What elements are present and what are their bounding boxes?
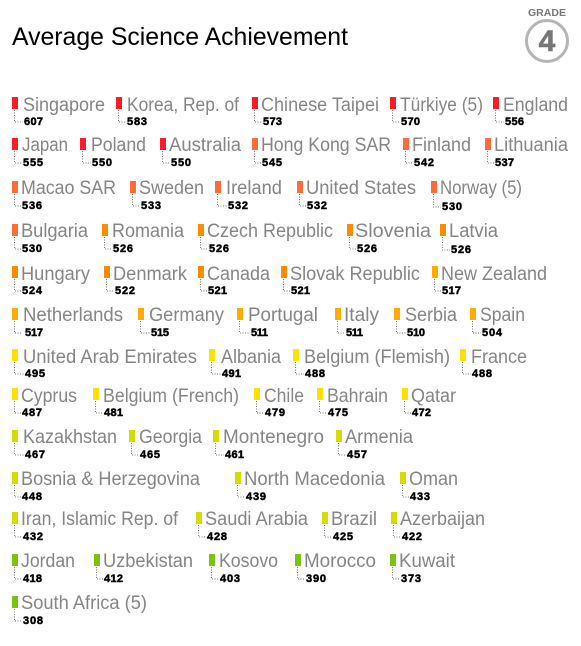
item: Latvia 526 bbox=[440, 221, 498, 256]
item: Brazil 425 bbox=[322, 509, 377, 543]
item: Slovak Republic 521 bbox=[281, 264, 420, 297]
item: Chinese Taipei 573 bbox=[252, 95, 379, 128]
item: Canada 521: Canada bbox=[207, 264, 270, 285]
item: Qatar 472: 472 bbox=[412, 407, 431, 419]
item: Latvia 526: Latvia bbox=[449, 221, 498, 242]
item: Oman 433: Oman bbox=[409, 469, 458, 490]
item: Kosovo 403 bbox=[209, 551, 278, 585]
item: Georgia 465 bbox=[129, 427, 202, 461]
item: Slovenia 526 bbox=[347, 221, 431, 255]
item: Belgium (French) 481 bbox=[93, 386, 239, 419]
item: Japan 555: 555 bbox=[23, 157, 43, 169]
item: Azerbaijan 422: 422 bbox=[402, 531, 422, 543]
item: Chile 479 bbox=[254, 386, 304, 419]
item: United States 532: United States bbox=[306, 178, 416, 199]
item: Japan 555: Japan bbox=[22, 135, 68, 156]
item: Türkiye 570: 570 bbox=[401, 116, 420, 128]
item: Hungary 524 bbox=[12, 264, 90, 297]
item: Singapore 607 bbox=[12, 95, 105, 128]
item: Armenia 457 bbox=[336, 427, 413, 461]
item: England 556: England bbox=[503, 95, 568, 116]
item: Türkiye 570: Türkiye (5) bbox=[400, 95, 483, 116]
item: Albania 491: Albania bbox=[221, 347, 281, 368]
item: Jordan 418: Jordan bbox=[21, 551, 75, 572]
item: Morocco 390: 390 bbox=[306, 573, 326, 585]
item: Poland 550 bbox=[80, 135, 146, 169]
item: Georgia 465: Georgia bbox=[139, 427, 202, 448]
item: Hong Kong SAR 545: Hong Kong SAR bbox=[261, 135, 391, 156]
item: Kosovo 403: 403 bbox=[220, 573, 240, 585]
item: Italy 511 bbox=[335, 305, 379, 339]
grade badge: GRADE bbox=[528, 8, 566, 19]
item: New Zealand 517 bbox=[432, 264, 547, 297]
item: Finland 542: Finland bbox=[412, 135, 471, 156]
item: Macao SAR 536: 536 bbox=[22, 200, 42, 212]
item: Denmark 522 bbox=[104, 264, 187, 297]
item: South Africa 308: South Africa (5) bbox=[21, 593, 147, 614]
item: Iran 432: 432 bbox=[23, 531, 43, 543]
item: Montenegro 461: 461 bbox=[225, 449, 244, 461]
item: Netherlands 517 bbox=[12, 305, 123, 339]
item: Slovenia 526: Slovenia bbox=[355, 221, 431, 242]
item: United Arab Emirates 495: United Arab Emirates bbox=[23, 347, 197, 368]
item: Sweden 533 bbox=[130, 178, 204, 212]
item: Belgium (Flemish) 488 bbox=[293, 347, 450, 380]
item: Germany 515: 515 bbox=[151, 327, 169, 339]
item: Sweden 533: 533 bbox=[141, 200, 161, 212]
item: Chile 479: 479 bbox=[265, 407, 285, 419]
item: Qatar 472 bbox=[402, 386, 457, 419]
item: Kazakhstan 467 bbox=[12, 427, 117, 461]
item: Hong Kong SAR 545 bbox=[252, 135, 391, 169]
item: Belgium (Flemish) 488: 488 bbox=[305, 368, 325, 380]
item: Korea 583 bbox=[116, 95, 240, 128]
item: Slovak Republic 521: 521 bbox=[291, 285, 310, 297]
item: Iran 432 bbox=[12, 509, 179, 543]
item: Romania 526 bbox=[102, 221, 184, 255]
item: Jordan 418 bbox=[12, 551, 75, 585]
item: Bulgaria 530 bbox=[12, 221, 88, 255]
item: Kazakhstan 467: Kazakhstan bbox=[23, 427, 117, 448]
item: Iran 432: Iran, Islamic Rep. of bbox=[21, 509, 179, 530]
item: North Macedonia 439 bbox=[235, 469, 385, 503]
item: Kosovo 403: Kosovo bbox=[219, 551, 278, 572]
item: Australia 550: Australia bbox=[169, 135, 241, 156]
item: United States 532 bbox=[297, 178, 416, 212]
item: Chinese Taipei 573: Chinese Taipei bbox=[261, 95, 379, 116]
item: Saudi Arabia 428: Saudi Arabia bbox=[205, 509, 308, 530]
item: Slovenia 526: 526 bbox=[357, 243, 377, 255]
item: Oman 433 bbox=[400, 469, 458, 503]
item: Australia 550: 550 bbox=[171, 157, 191, 169]
item: Chile 479: Chile bbox=[264, 386, 304, 407]
item: Jordan 418: 418 bbox=[23, 573, 42, 585]
item: Bosnia & Herzegovina 448 bbox=[12, 469, 200, 503]
item: Brazil 425: 425 bbox=[333, 531, 353, 543]
item: Albania 491 bbox=[209, 347, 281, 380]
item: Romania 526: 526 bbox=[113, 243, 133, 255]
item: Ireland 532: Ireland bbox=[226, 178, 282, 199]
item: Norway 530 bbox=[431, 178, 522, 213]
item: Bahrain 475: 475 bbox=[328, 407, 348, 419]
item: Denmark 522: Denmark bbox=[113, 264, 187, 285]
item: Ireland 532: 532 bbox=[228, 200, 248, 212]
item: New Zealand 517: New Zealand bbox=[441, 264, 547, 285]
item: Türkiye 570 bbox=[390, 95, 483, 128]
item: Armenia 457: Armenia bbox=[345, 427, 413, 448]
item: Montenegro 461 bbox=[213, 427, 324, 461]
item: Japan 555 bbox=[12, 135, 68, 169]
item: Spain 504 bbox=[470, 305, 525, 339]
item: Hong Kong SAR 545: 545 bbox=[262, 157, 282, 169]
item: Czech Republic 526 bbox=[198, 221, 333, 255]
item: England 556 bbox=[493, 95, 568, 128]
item: Morocco 390: Morocco bbox=[304, 551, 376, 572]
item: Macao SAR 536: Macao SAR bbox=[21, 178, 116, 199]
item: Latvia 526: 526 bbox=[451, 244, 471, 256]
item: Korea 583: 583 bbox=[127, 116, 147, 128]
item: Bulgaria 530: Bulgaria bbox=[21, 221, 88, 242]
item: United Arab Emirates 495 bbox=[12, 347, 197, 380]
item: Spain 504: 504 bbox=[482, 327, 503, 339]
item: South Africa 308 bbox=[12, 593, 147, 627]
item: Qatar 472: Qatar bbox=[411, 386, 457, 407]
item: Korea 583: Korea, Rep. of bbox=[127, 95, 240, 116]
item: Germany 515 bbox=[138, 305, 224, 339]
item: Belgium (French) 481: Belgium (French) bbox=[103, 386, 239, 407]
item: United States 532: 532 bbox=[307, 200, 327, 212]
item: Azerbaijan 422: Azerbaijan bbox=[400, 509, 485, 530]
item: Morocco 390 bbox=[295, 551, 376, 585]
item: Lithuania 537: 537 bbox=[495, 157, 514, 169]
item: Italy 511: Italy bbox=[344, 305, 379, 326]
item: Uzbekistan 412: Uzbekistan bbox=[103, 551, 193, 572]
item: Poland 550: Poland bbox=[91, 135, 146, 156]
item: Georgia 465: 465 bbox=[140, 449, 160, 461]
item: Albania 491: 491 bbox=[222, 368, 241, 380]
title: Average Science Achievement bbox=[12, 24, 348, 51]
item: Portugal 511 bbox=[237, 305, 318, 339]
item: Belgium (Flemish) 488: Belgium (Flemish) bbox=[304, 347, 450, 368]
item: Canada 521 bbox=[198, 264, 270, 297]
item: Belgium (French) 481: 481 bbox=[104, 407, 123, 419]
item: Lithuania 537: Lithuania bbox=[494, 135, 568, 156]
item: Sweden 533: Sweden bbox=[139, 178, 204, 199]
item: Oman 433: 433 bbox=[410, 491, 430, 503]
item: North Macedonia 439: North Macedonia bbox=[244, 469, 385, 490]
item: Australia 550 bbox=[160, 135, 241, 169]
item: Uzbekistan 412 bbox=[94, 551, 193, 585]
item: Canada 521: 521 bbox=[208, 285, 227, 297]
item: United Arab Emirates 495: 495 bbox=[25, 368, 45, 380]
item: Kuwait 373: 373 bbox=[401, 573, 421, 585]
item: Brazil 425: Brazil bbox=[331, 509, 377, 530]
item: Bahrain 475 bbox=[317, 386, 388, 419]
item: Lithuania 537 bbox=[485, 135, 568, 169]
item: Hungary 524: 524 bbox=[22, 285, 43, 297]
item: Czech Republic 526: Czech Republic bbox=[207, 221, 333, 242]
item: Netherlands 517: 517 bbox=[25, 327, 43, 339]
item: Bosnia & Herzegovina 448: Bosnia & Herzegovina bbox=[21, 469, 200, 490]
item: Poland 550: 550 bbox=[92, 157, 112, 169]
item: France 488 bbox=[460, 347, 527, 380]
item: Netherlands 517: Netherlands bbox=[23, 305, 123, 326]
item: Montenegro 461: Montenegro bbox=[223, 427, 324, 448]
item: France 488: France bbox=[471, 347, 527, 368]
item: Kazakhstan 467: 467 bbox=[25, 449, 45, 461]
item: Uzbekistan 412: 412 bbox=[104, 573, 123, 585]
item: Hungary 524: Hungary bbox=[21, 264, 90, 285]
item: Cyprus 487: Cyprus bbox=[21, 386, 77, 407]
grade badge: 4 bbox=[539, 25, 556, 58]
item: Italy 511: 511 bbox=[346, 327, 363, 339]
item: Ireland 532 bbox=[215, 178, 282, 212]
item: New Zealand 517: 517 bbox=[442, 285, 461, 297]
item: Finland 542: 542 bbox=[414, 157, 434, 169]
item: France 488: 488 bbox=[472, 368, 492, 380]
item: Serbia 510: 510 bbox=[407, 327, 425, 339]
item: Armenia 457: 457 bbox=[347, 449, 367, 461]
item: Serbia 510: Serbia bbox=[405, 305, 457, 326]
item: Kuwait 373: Kuwait bbox=[399, 551, 456, 572]
item: Spain 504: Spain bbox=[480, 305, 525, 326]
item: North Macedonia 439: 439 bbox=[246, 491, 266, 503]
item: Azerbaijan 422 bbox=[391, 509, 485, 543]
item: Chinese Taipei 573: 573 bbox=[263, 116, 282, 128]
item: Portugal 511: 511 bbox=[251, 327, 268, 339]
item: Kuwait 373 bbox=[390, 551, 456, 585]
item: Singapore 607: Singapore bbox=[23, 95, 105, 116]
item: Portugal 511: Portugal bbox=[248, 305, 318, 326]
item: South Africa 308: 308 bbox=[23, 615, 43, 627]
item: Singapore 607: 607 bbox=[24, 116, 43, 128]
item: Denmark 522: 522 bbox=[115, 285, 135, 297]
item: Bosnia & Herzegovina 448: 448 bbox=[22, 491, 42, 503]
item: Finland 542 bbox=[403, 135, 471, 169]
item: Norway 530: 530 bbox=[442, 201, 462, 213]
item: Cyprus 487 bbox=[12, 386, 77, 419]
item: Germany 515: Germany bbox=[149, 305, 224, 326]
item: Bahrain 475: Bahrain bbox=[327, 386, 388, 407]
item: Saudi Arabia 428 bbox=[196, 509, 308, 543]
item: Saudi Arabia 428: 428 bbox=[207, 531, 227, 543]
item: Czech Republic 526: 526 bbox=[209, 243, 229, 255]
item: Bulgaria 530: 530 bbox=[22, 243, 42, 255]
item: England 556: 556 bbox=[505, 116, 524, 128]
item: Serbia 510 bbox=[394, 305, 457, 339]
item: Slovak Republic 521: Slovak Republic bbox=[290, 264, 420, 285]
item: Norway 530: Norway (5) bbox=[440, 178, 522, 199]
grade badge bbox=[526, 8, 568, 62]
item: Cyprus 487: 487 bbox=[22, 407, 42, 419]
item: Macao SAR 536 bbox=[12, 178, 116, 212]
item: Romania 526: Romania bbox=[112, 221, 184, 242]
